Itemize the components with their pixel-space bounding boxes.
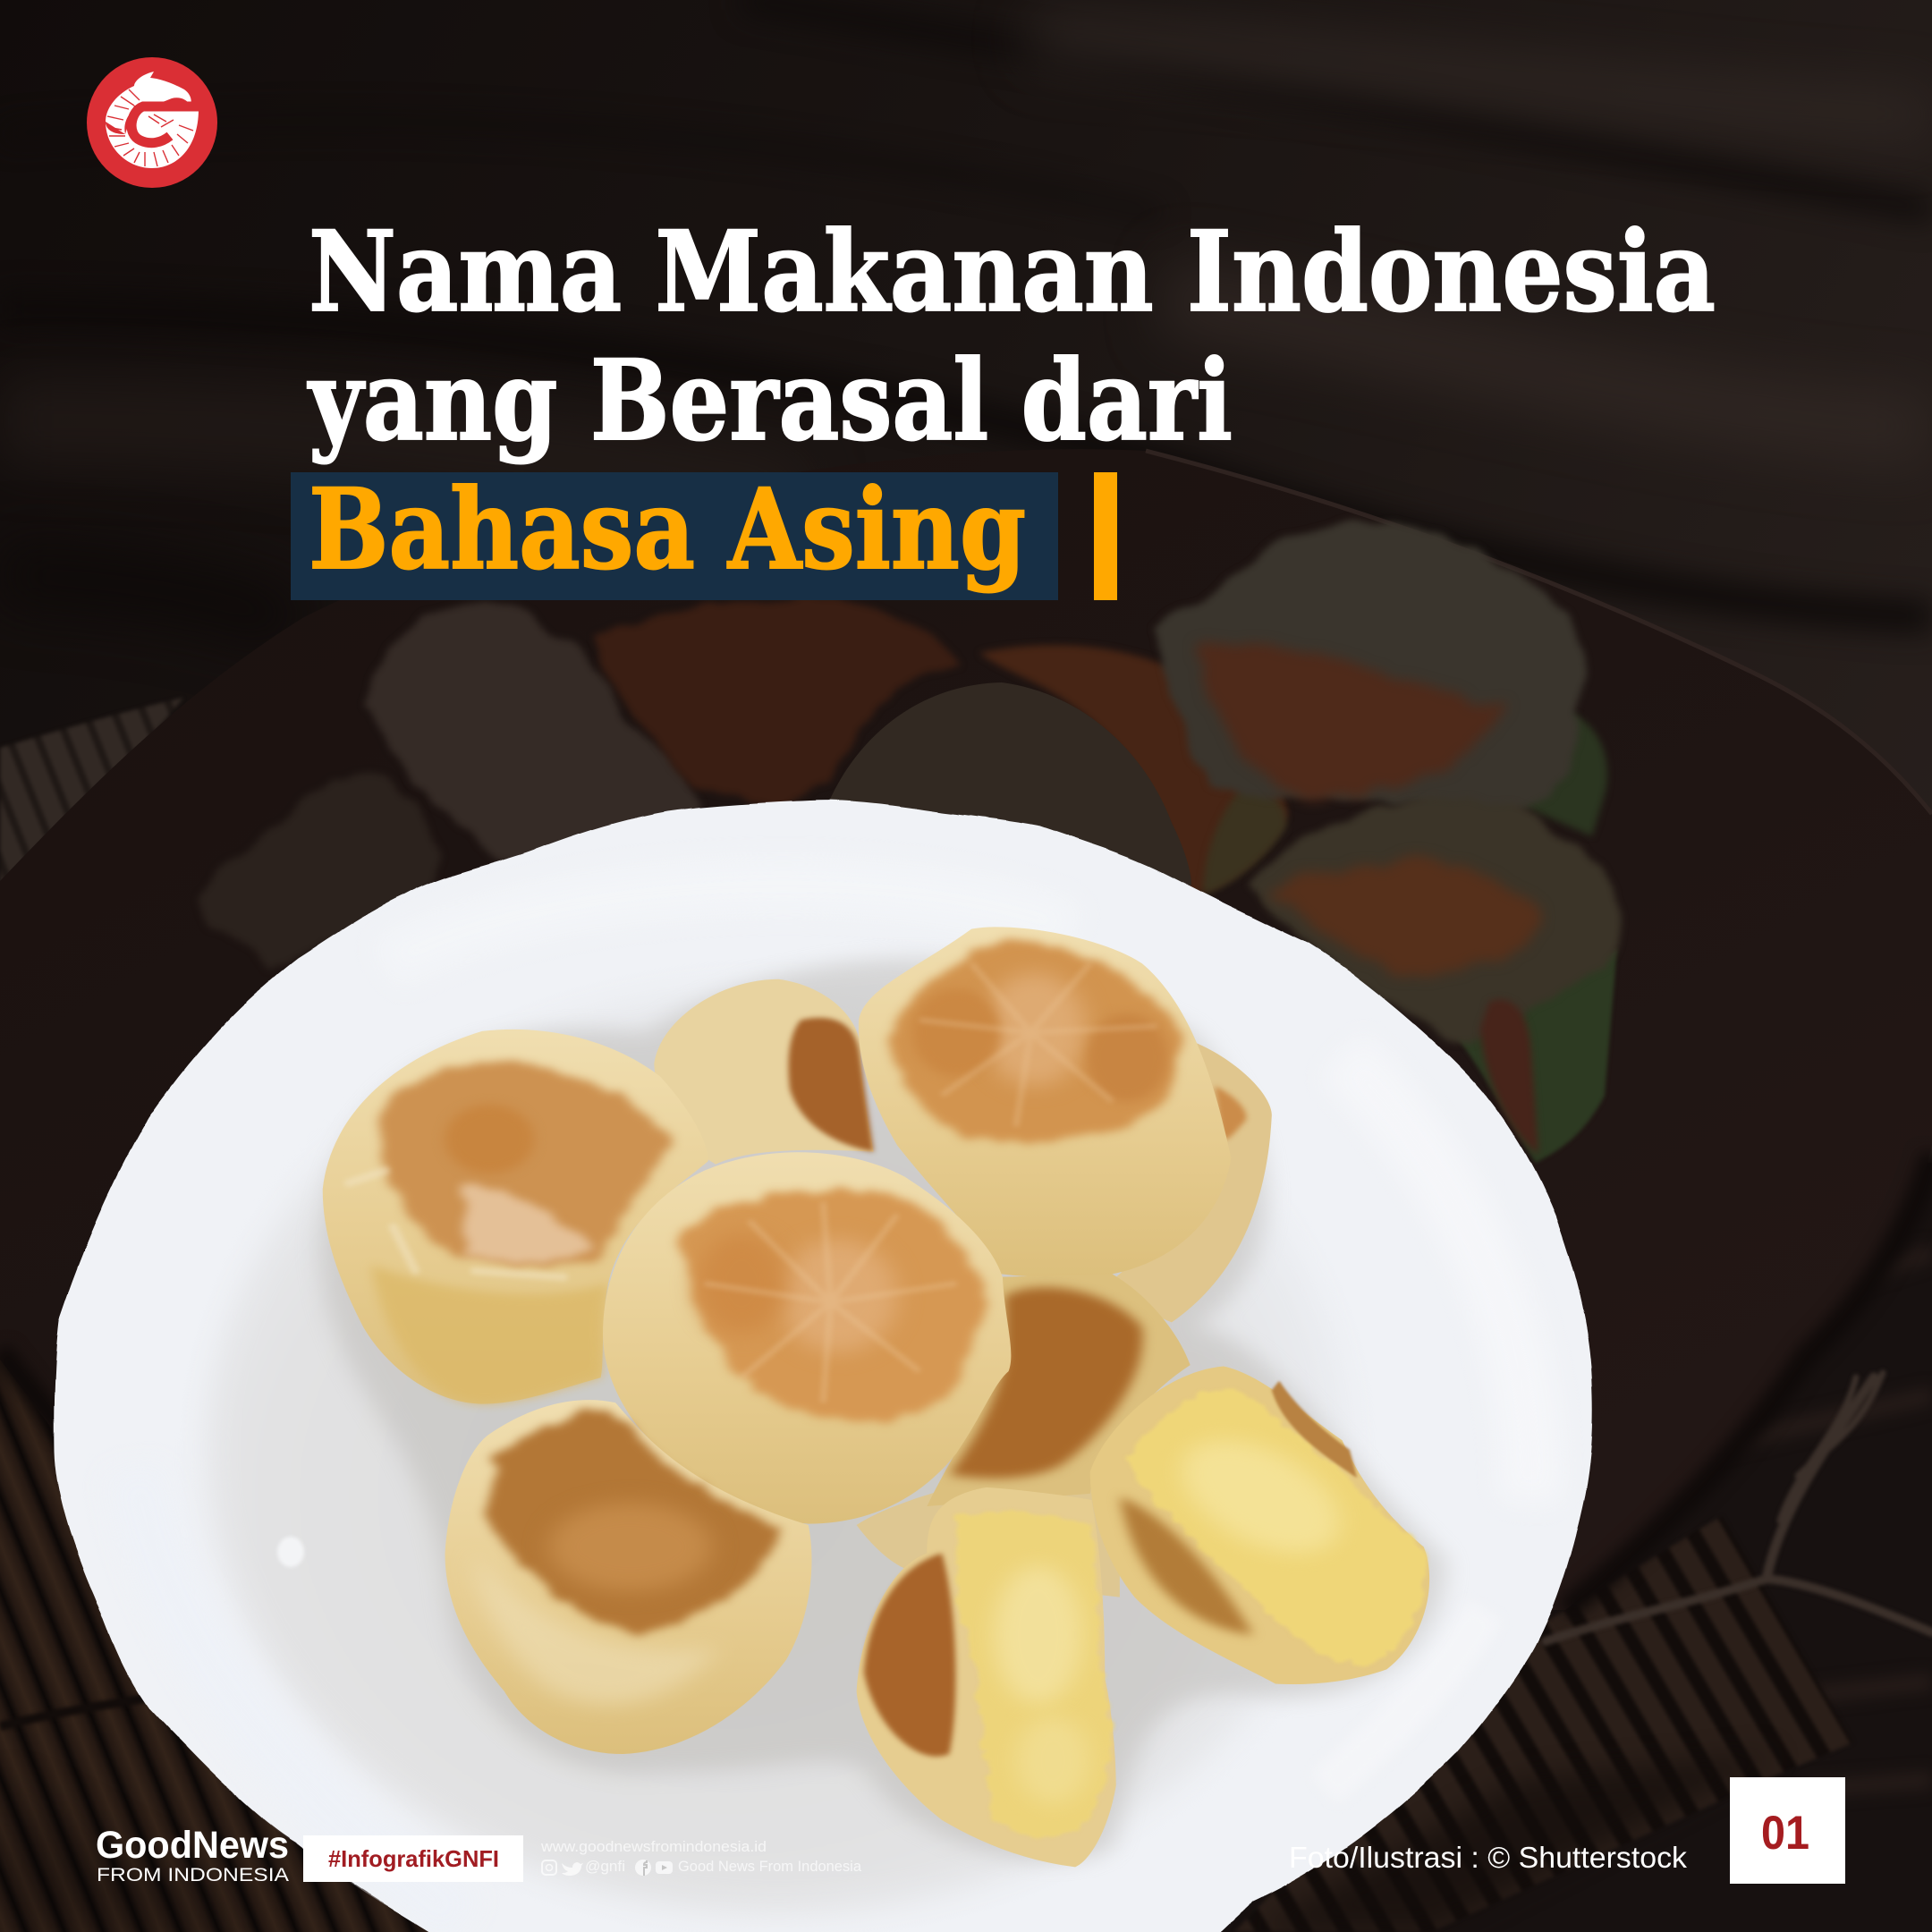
logo G stroke: [131, 106, 199, 143]
bamboo mat lower-right: [1234, 1516, 1853, 1932]
pastry left: [323, 1030, 708, 1404]
highlighted title line: Bahasa Asing: [309, 465, 1026, 595]
bitter gourd upper: [1152, 522, 1588, 814]
white plate: [55, 801, 1593, 1932]
title line 1: Nama Makanan Indonesia: [309, 208, 1716, 337]
title: [307, 208, 1716, 466]
radial streaks: [919, 963, 1157, 1127]
pastry center: [603, 1152, 1011, 1524]
sauced fritter: [590, 601, 964, 804]
pastry behind right: [1116, 1042, 1272, 1322]
darkened side dishes on serving plate: [199, 522, 1620, 1163]
pastry top right: [859, 927, 1231, 1277]
page number: [1730, 1777, 1845, 1884]
dark serving plate: [0, 449, 1932, 1610]
bitter gourd lower: [1251, 800, 1620, 1046]
gourd green rim lower: [1457, 948, 1617, 1163]
pastry shadow: [319, 958, 1446, 1861]
pastry bottom-left: [445, 1400, 811, 1754]
website and social handles: Good News From Indonesia: [678, 1858, 862, 1875]
logo emblem hatching: [107, 89, 193, 166]
radial streaks: [705, 1202, 957, 1402]
GoodNews logo wordmark: GoodNews: [96, 1824, 289, 1867]
sauced tofu: [979, 645, 1288, 897]
icon: twitter: [562, 1862, 583, 1876]
page number: 01: [1761, 1807, 1809, 1860]
bamboo mat lower-left: [0, 1351, 465, 1932]
egg slice: [827, 682, 1191, 886]
hashtag label: #InfografikGNFI: [328, 1845, 499, 1872]
pastries: bakpia pia: [319, 927, 1446, 1867]
GoodNews logo wordmark: [96, 1824, 289, 1885]
pastry top middle: [654, 979, 874, 1165]
pastry under right: [857, 1274, 1191, 1597]
icon: facebook: [635, 1860, 651, 1876]
website and social handles: [540, 1838, 862, 1876]
hashtag label: [303, 1835, 523, 1882]
sauce upper: [1195, 643, 1503, 801]
flaky pastry highlights: [349, 1171, 564, 1277]
icon: youtube: [656, 1861, 673, 1874]
photo credit: Foto/Ilustrasi : © Shutterstock: [1289, 1841, 1688, 1874]
rope fringe of the mat: [1546, 1373, 1932, 1641]
GoodNews logo wordmark: FROM INDONESIA: [97, 1865, 289, 1885]
dumpling left: [362, 604, 707, 863]
typing cursor bar: [1094, 472, 1117, 600]
bamboo mat top-left: [0, 698, 183, 886]
gourd green rim upper: [1521, 706, 1607, 836]
website and social handles: @gnfi: [585, 1858, 625, 1875]
icon: instagram: [542, 1860, 556, 1875]
title line 2: yang Berasal dari: [307, 336, 1233, 466]
logo emblem white body: [106, 72, 199, 168]
website and social handles: www.goodnewsfromindonesia.id: [540, 1838, 767, 1855]
pastry broken right: [1090, 1367, 1429, 1684]
dumpling lower-left: [199, 773, 440, 970]
logo badge: [87, 57, 217, 188]
sauce lower: [1270, 859, 1543, 976]
pastry broken bottom: [857, 1487, 1116, 1867]
